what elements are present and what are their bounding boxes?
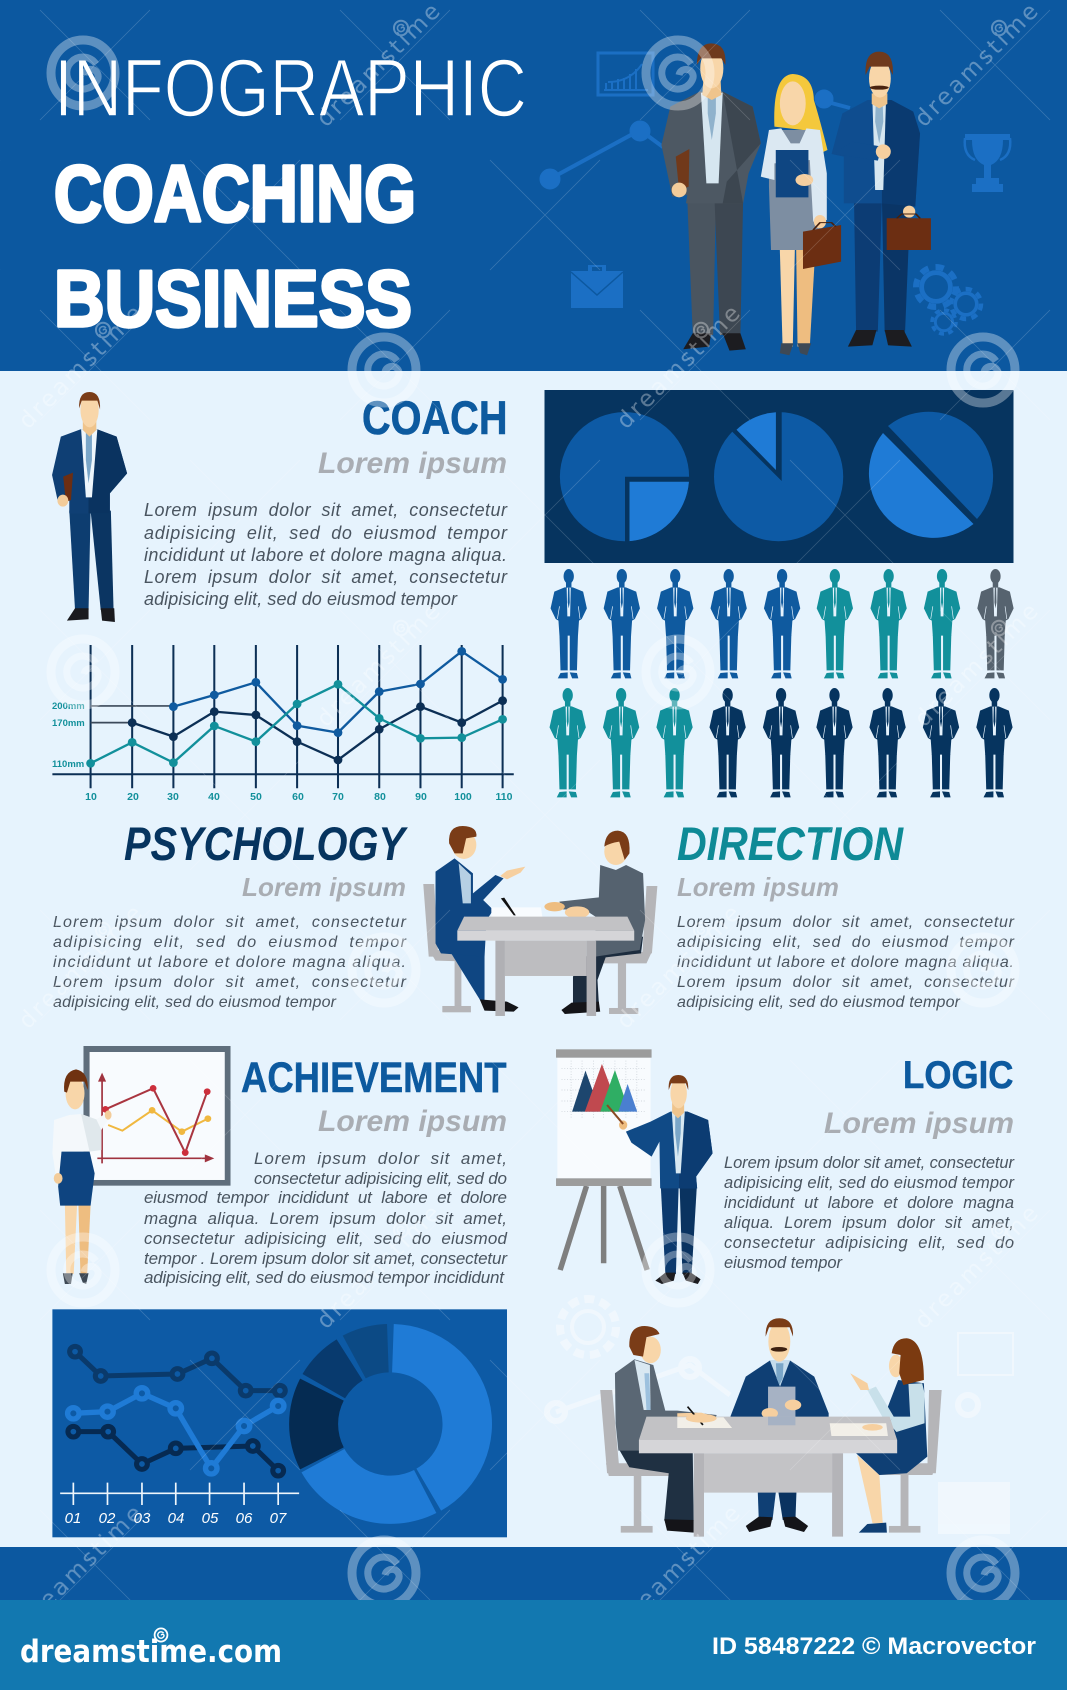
illustration: faint background icons bbox=[547, 1299, 1013, 1534]
text: direction body: adipisicing elit, sed do eiusmod tempor bbox=[677, 934, 1015, 951]
chairs bbox=[600, 1390, 942, 1533]
text: coach body: adipisicing elit, sed do eiusmod tempor bbox=[144, 589, 458, 609]
man left bbox=[436, 826, 542, 1012]
people silhouettes row 1 bbox=[551, 569, 1014, 678]
man left bbox=[615, 1326, 720, 1533]
chart labels: 40 bbox=[208, 791, 220, 803]
text: logic body: Lorem ipsum dolor sit amet, consectetur bbox=[724, 1154, 1016, 1172]
axis labels: 02 bbox=[99, 1510, 116, 1527]
chart labels: 80 bbox=[374, 791, 386, 803]
heading: psychology: PSYCHOLOGY bbox=[124, 817, 408, 870]
figure: woman with folder bbox=[761, 74, 841, 355]
title line: coaching: COACHING bbox=[54, 149, 416, 238]
axis labels: 05 bbox=[202, 1510, 219, 1527]
chart labels: 100 bbox=[454, 791, 472, 803]
text: coach body bbox=[144, 500, 508, 609]
chairs bbox=[423, 884, 657, 1014]
text: coach body: incididunt ut labore et dolore magna aliqua. bbox=[144, 545, 507, 565]
text: direction body: Lorem ipsum dolor sit amet, consectetur bbox=[677, 914, 1015, 931]
panel: line chart and donut bbox=[52, 1309, 507, 1537]
watermark spirals and text: dreamstime bbox=[14, 1501, 148, 1634]
title bbox=[54, 43, 527, 343]
figure: man with moustache bbox=[832, 52, 931, 347]
axis labels: 07 bbox=[270, 1510, 287, 1527]
watermark spirals and text: dreamstime bbox=[14, 301, 148, 434]
icon: small spiral bbox=[155, 1628, 167, 1642]
subheading: achievement: Lorem ipsum bbox=[318, 1105, 507, 1138]
title line: infographic: INFOGRAPHIC bbox=[54, 43, 527, 134]
axis bbox=[60, 1483, 299, 1505]
figure: coach bbox=[52, 392, 127, 622]
illustration: team meeting bbox=[600, 1318, 942, 1537]
watermark spirals and text: dreamstime bbox=[910, 1201, 1044, 1334]
line chart: coach bbox=[52, 645, 514, 788]
watermark spirals and text: dreamstime bbox=[312, 0, 446, 132]
chart labels: 30 bbox=[167, 791, 179, 803]
icon: trophy bbox=[965, 134, 1010, 192]
watermark spirals and text: dreamstime bbox=[14, 901, 148, 1034]
axis labels: 03 bbox=[134, 1510, 151, 1527]
text: psychology body: Lorem ipsum dolor sit amet, consectetur bbox=[53, 974, 407, 991]
chart labels: 110 bbox=[496, 791, 513, 803]
footer logo: dreamstime.com bbox=[20, 1634, 282, 1670]
axis labels bbox=[65, 1510, 287, 1527]
text: logic body: consectetur adipisicing elit, sed do bbox=[724, 1234, 1014, 1252]
text: achievement body: consectetur adipisicing elit, sed do bbox=[254, 1169, 507, 1188]
chart labels: 20 bbox=[127, 791, 139, 803]
woman bbox=[52, 1069, 112, 1284]
desk bbox=[457, 917, 634, 1016]
icon: chart frame bbox=[598, 53, 653, 95]
text: direction body: adipisicing elit, sed do eiusmod tempor bbox=[677, 994, 961, 1011]
series: teal bbox=[86, 680, 507, 768]
subheading: logic: Lorem ipsum bbox=[824, 1107, 1014, 1140]
axis labels: 04 bbox=[168, 1510, 184, 1527]
text: achievement body: eiusmod tempor incididunt ut labore et dolore bbox=[144, 1188, 507, 1207]
series: dark top bbox=[70, 1346, 285, 1396]
subheading: coach: Lorem ipsum bbox=[318, 447, 507, 480]
text: logic body: eiusmod tempor bbox=[724, 1254, 844, 1272]
text: direction body: incididunt ut labore et dolore magna aliqua. bbox=[677, 954, 1014, 971]
figure: man in gray suit bbox=[661, 43, 761, 351]
title line: business: BUSINESS bbox=[54, 254, 412, 343]
header band bbox=[0, 0, 1067, 371]
axis labels: 06 bbox=[236, 1510, 253, 1527]
watermark spirals and text: dreamstime bbox=[612, 901, 746, 1034]
text: logic body bbox=[724, 1154, 1016, 1272]
text: achievement body: Lorem ipsum dolor sit amet, bbox=[254, 1149, 507, 1168]
text: psychology body bbox=[53, 914, 407, 1011]
chart labels: 110mm bbox=[52, 759, 84, 770]
chart labels: 200mm bbox=[52, 701, 85, 712]
series: light blue bbox=[68, 1388, 284, 1474]
pie 2 bbox=[714, 405, 843, 541]
text: direction body: Lorem ipsum dolor sit amet, consectetur bbox=[677, 974, 1015, 991]
footer band bbox=[0, 1600, 1067, 1690]
watermark spirals and text: dreamstime bbox=[312, 1201, 446, 1334]
pie 1 bbox=[560, 412, 692, 545]
people silhouettes row 2 bbox=[550, 688, 1013, 797]
text: direction body bbox=[677, 914, 1015, 1011]
text: psychology body: incididunt ut labore et dolore magna aliqua. bbox=[53, 954, 406, 971]
chart labels: 50 bbox=[250, 791, 262, 803]
illustration: presenter and board bbox=[52, 1046, 231, 1284]
chart labels: 10 bbox=[85, 791, 97, 803]
heading: direction: DIRECTION bbox=[677, 817, 904, 870]
icon: gears bbox=[916, 267, 981, 334]
chart labels: 170mm bbox=[52, 718, 85, 729]
man right bbox=[544, 831, 645, 1014]
header business team bbox=[661, 43, 931, 355]
watermark spirals and text: dreamstime bbox=[312, 599, 446, 732]
watermark spirals and text: dreamstime bbox=[612, 1501, 746, 1634]
icon: briefcase bbox=[571, 265, 623, 308]
pie 3 bbox=[869, 412, 993, 538]
board bbox=[83, 1046, 231, 1186]
section: psychology bbox=[53, 817, 408, 1011]
footer credit: ID 58487222 © Macrovector bbox=[712, 1633, 1036, 1660]
table bbox=[639, 1407, 897, 1537]
text: logic body: incididunt ut labore et dolore magna bbox=[724, 1194, 1014, 1212]
chart labels bbox=[52, 701, 513, 803]
header background icons bbox=[540, 53, 1010, 334]
woman bbox=[850, 1338, 927, 1533]
text: achievement body bbox=[144, 1149, 508, 1287]
heading: coach: COACH bbox=[362, 391, 508, 444]
series: dark blue bbox=[128, 696, 507, 764]
watermark spirals and text: dreamstime bbox=[910, 0, 1044, 132]
section: logic bbox=[556, 1049, 1016, 1284]
flipchart bbox=[556, 1049, 652, 1270]
subheading: direction: Lorem ipsum bbox=[677, 872, 839, 902]
section: direction bbox=[677, 817, 1015, 1011]
text: achievement body: tempor . Lorem ipsum dolor sit amet, consectetur bbox=[144, 1249, 508, 1268]
man middle bbox=[730, 1318, 829, 1532]
text: achievement body: magna aliqua. Lorem ipsum dolor sit amet, bbox=[144, 1209, 507, 1228]
illustration: man at flipchart bbox=[556, 1049, 713, 1284]
bottom band bbox=[0, 1547, 1067, 1600]
subheading: psychology: Lorem ipsum bbox=[242, 872, 406, 902]
text: psychology body: Lorem ipsum dolor sit amet, consectetur bbox=[53, 914, 407, 931]
watermark spirals and text: dreamstime bbox=[910, 599, 1044, 732]
chart labels: 60 bbox=[292, 791, 304, 803]
chart labels: 70 bbox=[332, 791, 344, 803]
chart labels: 90 bbox=[415, 791, 427, 803]
series: blue bbox=[169, 647, 507, 737]
illustration: two men at a desk bbox=[423, 826, 657, 1016]
donut chart bbox=[289, 1324, 492, 1524]
text: coach body: Lorem ipsum dolor sit amet, consectetur bbox=[144, 500, 508, 520]
icon: connected line nodes bbox=[540, 90, 850, 189]
man bbox=[607, 1075, 713, 1284]
panel: pie charts bbox=[544, 390, 1014, 563]
text: logic body: aliqua. Lorem ipsum dolor sit amet, bbox=[724, 1214, 1014, 1232]
text: logic body: adipisicing elit, sed do eiusmod tempor bbox=[724, 1174, 1016, 1192]
text: achievement body: adipisicing elit, sed do eiusmod tempor incididunt bbox=[144, 1268, 505, 1287]
axis labels: 01 bbox=[65, 1510, 81, 1527]
heading: logic: LOGIC bbox=[903, 1054, 1014, 1097]
text: coach body: adipisicing elit, sed do eiusmod tempor bbox=[144, 523, 508, 543]
section: coach bbox=[52, 391, 508, 622]
text: psychology body: adipisicing elit, sed do eiusmod tempor bbox=[53, 994, 337, 1011]
section: achievement bbox=[52, 1046, 508, 1287]
series: navy bbox=[68, 1426, 284, 1476]
watermark spirals and text: dreamstime bbox=[612, 301, 746, 434]
text: psychology body: adipisicing elit, sed do eiusmod tempor bbox=[53, 934, 407, 951]
text: achievement body: consectetur adipisicing elit, sed do eiusmod bbox=[144, 1229, 508, 1248]
text: coach body: Lorem ipsum dolor sit amet, consectetur bbox=[144, 567, 508, 587]
heading: achievement: ACHIEVEMENT bbox=[241, 1054, 506, 1102]
